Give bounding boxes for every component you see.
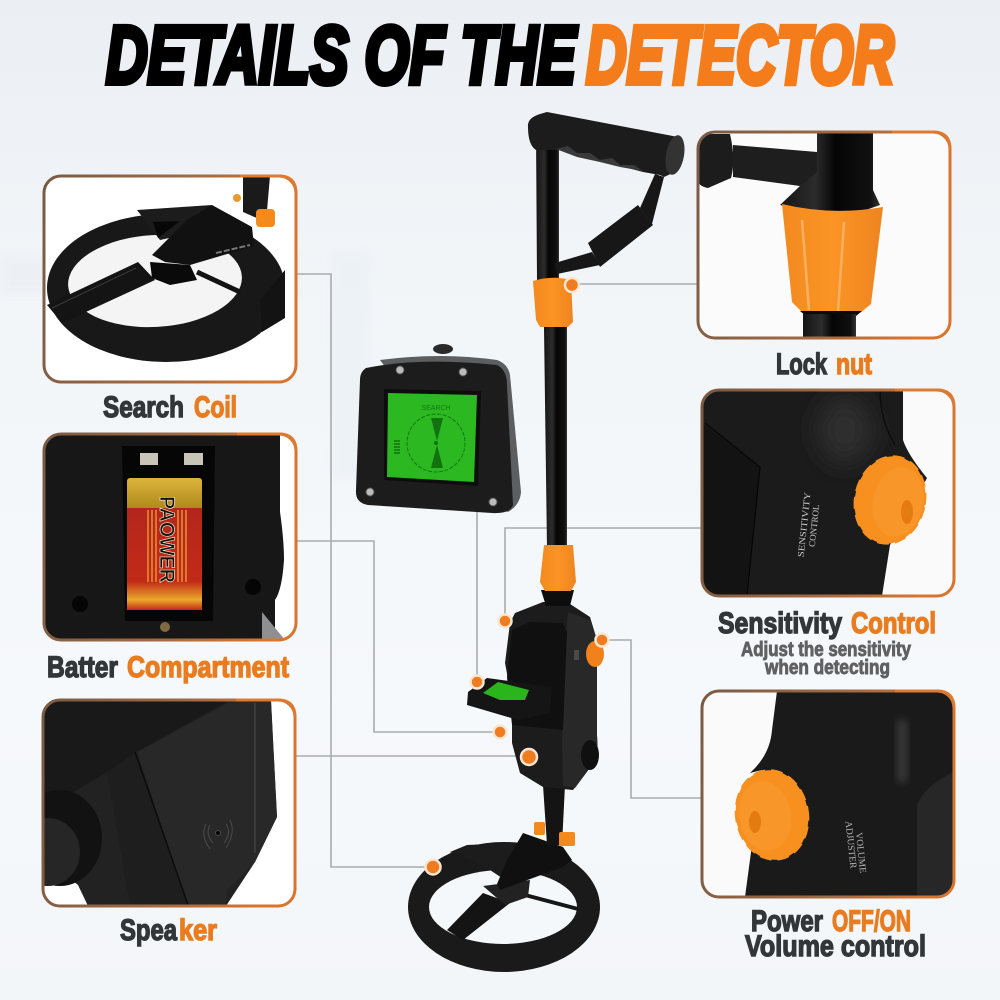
orange knobs (233, 194, 275, 227)
display readout (394, 405, 465, 472)
lower collar (540, 545, 576, 591)
printed label (798, 492, 820, 557)
label: lock nut: Lock (776, 348, 827, 381)
label: speaker: Spea (120, 914, 177, 947)
upper collar (533, 278, 573, 327)
handle brace (555, 174, 664, 274)
text: sensitivity description: Adjust the sensitivity (741, 639, 912, 661)
label: power off/on volume control: OFF/ON (832, 905, 911, 938)
label: power off/on volume control: Volume control (745, 930, 926, 963)
lower coil (408, 833, 600, 972)
panel: search coil (44, 176, 296, 382)
label: speaker: ker (179, 914, 217, 947)
printed label: ADJUSTER (843, 821, 858, 870)
callout markers (426, 278, 608, 874)
volume knob (586, 641, 604, 667)
panel: sensitivity control (702, 390, 954, 596)
speaker icon (204, 820, 232, 849)
lower stem (543, 785, 565, 845)
title: DETAILS OF THE (106, 10, 578, 101)
printed label: VOLUME (853, 832, 867, 874)
upper shaft (536, 128, 559, 280)
volume knob (734, 769, 810, 861)
stem knobs (534, 822, 575, 846)
text: sensitivity description (741, 639, 912, 679)
printed label (846, 822, 866, 873)
coil ring (47, 214, 285, 362)
printed label: SENSITIVITY (796, 491, 812, 558)
label: search coil: Coil (194, 391, 237, 424)
label: power off/on volume control: Power (751, 905, 823, 938)
coil arms and head (47, 176, 285, 332)
label: sensitivity control: Sensitivity (718, 607, 842, 640)
text: sensitivity description: when detecting (764, 657, 890, 679)
battery brand: PAOWER (155, 496, 178, 583)
panel: speaker (16, 700, 295, 906)
label: battery compartment: Batter (47, 651, 118, 684)
panel: lock nut (698, 132, 950, 340)
printed label: CONTROL (807, 504, 821, 547)
orange lock nut (782, 204, 883, 313)
display readout: SEARCH (421, 405, 451, 412)
battery (127, 453, 203, 610)
panel: volume control (702, 691, 954, 897)
label: battery compartment: Compartment (127, 651, 289, 684)
label: lock nut: nut (836, 348, 872, 381)
label: battery compartment (47, 651, 289, 684)
panel: battery compartment (44, 434, 296, 640)
connector lines (295, 274, 702, 867)
icon: LCD display enlarged (356, 344, 521, 513)
label: power off/on volume control (745, 905, 926, 963)
label: sensitivity control: Control (851, 607, 936, 640)
detector (408, 112, 687, 972)
handle grip (528, 112, 687, 177)
control box (505, 602, 598, 790)
sensitivity knob (854, 455, 926, 545)
upper and lower shafts (544, 327, 567, 548)
label: sensitivity control (718, 607, 936, 640)
display tray (467, 678, 552, 720)
label: search coil: Search (103, 391, 184, 424)
